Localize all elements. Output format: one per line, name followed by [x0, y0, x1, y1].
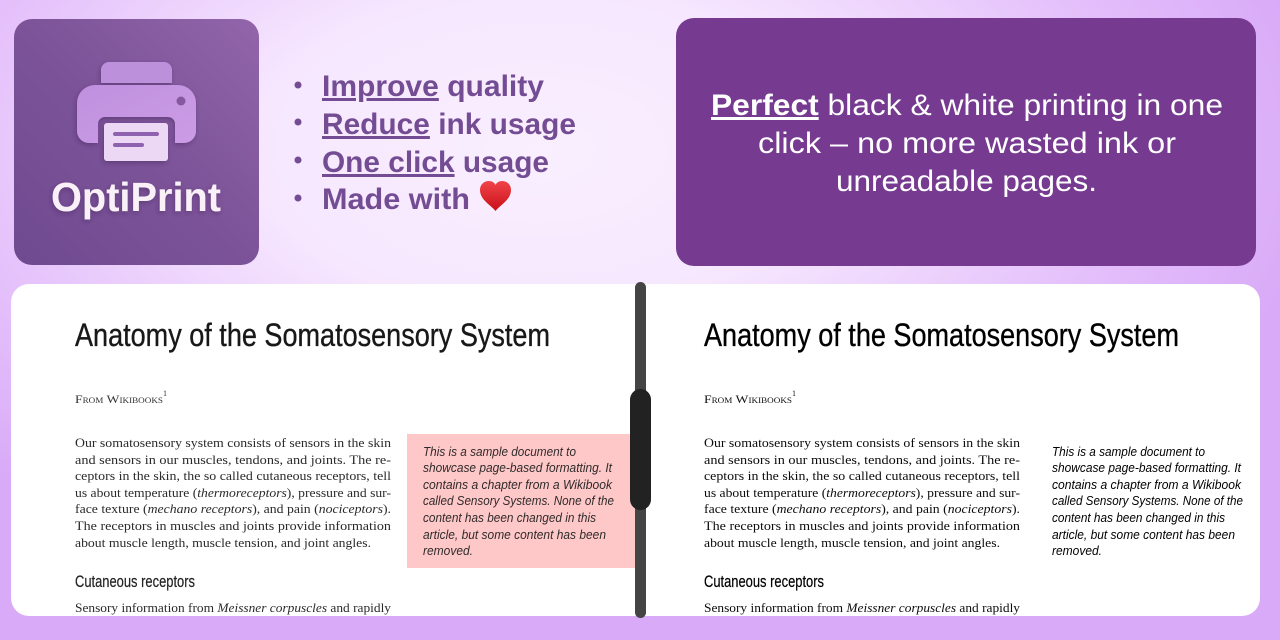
pink callout: content has been changed in this [423, 511, 596, 525]
right page: optimised document [704, 317, 1243, 615]
document title: Anatomy of the Somatosensory System [75, 317, 550, 353]
body paragraph [75, 435, 392, 550]
pink callout: contains a chapter from a Wikibook [423, 478, 613, 492]
callout without background: content has been changed in this [1052, 511, 1225, 525]
section heading: Cutaneous receptors [75, 573, 195, 591]
body paragraph: Our somatosensory system consists of sensors in the skin [75, 435, 392, 450]
body paragraph: ceptors in the skin, the so called cutaneous receptors, tell [704, 468, 1020, 483]
body paragraph: about muscle length, muscle tension, and joint angles. [75, 535, 371, 550]
bullet: one click usage: One click usage [322, 146, 549, 179]
icon: printer [77, 62, 196, 161]
body paragraph: and sensors in our muscles, tendons, and joints. The re- [75, 452, 391, 467]
bullet: made with heart: Made with [322, 183, 470, 216]
icon: heart [480, 181, 511, 211]
body paragraph: ceptors in the skin, the so called cutaneous receptors, tell [75, 468, 391, 483]
body paragraph: us about temperature ( thermoreceptors ), pressure and sur- [704, 485, 1020, 500]
body paragraph: about muscle length, muscle tension, and joint angles. [704, 535, 1000, 550]
tagline text: Perfect black & white printing in one [711, 89, 1223, 122]
cut-off paragraph: Sensory information from Meissner corpuscles and rapidly [75, 600, 392, 615]
byline: From Wikibooks [75, 392, 163, 406]
footnote mark: 1 [792, 389, 796, 398]
pink callout: This is a sample document to [423, 445, 576, 459]
callout without background: article, but some content has been [1052, 528, 1235, 542]
cut-off paragraph: Sensory information from Meissner corpuscles and rapidly [704, 600, 1021, 615]
tagline panel [676, 18, 1256, 266]
pink callout: removed. [423, 544, 473, 558]
body paragraph [704, 435, 1021, 550]
logo wordmark: OptiPrint [51, 174, 221, 220]
body paragraph: face texture ( mechano receptors ), and pain ( nociceptors ). [75, 501, 391, 516]
comparison slider [630, 282, 651, 618]
section heading: Cutaneous receptors [704, 573, 824, 591]
pink callout: called Sensory Systems. None of the [423, 494, 614, 508]
body paragraph: The receptors in muscles and joints provide information [75, 518, 392, 533]
callout without background: called Sensory Systems. None of the [1052, 494, 1243, 508]
bullet: reduce ink usage: Reduce ink usage [322, 108, 576, 141]
callout without background: showcase page-based formatting. It [1052, 461, 1242, 475]
body paragraph: The receptors in muscles and joints provide information [704, 518, 1021, 533]
pink callout: showcase page-based formatting. It [423, 461, 613, 475]
body paragraph: us about temperature ( thermoreceptors ), pressure and sur- [75, 485, 391, 500]
bullet: made with heart [294, 181, 511, 216]
pink callout: article, but some content has been [423, 528, 606, 542]
callout without background [1052, 445, 1243, 558]
tagline text: click – no more wasted ink or [758, 127, 1176, 160]
comparison card [11, 284, 1260, 616]
callout without background: removed. [1052, 544, 1102, 558]
left page: original document [75, 317, 636, 615]
logo panel [14, 19, 259, 265]
slider handle [630, 389, 651, 510]
document title: Anatomy of the Somatosensory System [704, 317, 1179, 353]
pink callout [407, 434, 636, 568]
tagline text: unreadable pages. [836, 165, 1097, 198]
footnote mark: 1 [163, 389, 167, 398]
body paragraph: and sensors in our muscles, tendons, and joints. The re- [704, 452, 1020, 467]
byline: From Wikibooks [704, 392, 792, 406]
bullet: improve quality: Improve quality [322, 70, 544, 103]
feature list [294, 70, 576, 216]
body paragraph: face texture ( mechano receptors ), and pain ( nociceptors ). [704, 501, 1020, 516]
tagline text [711, 89, 1223, 198]
callout without background: This is a sample document to [1052, 445, 1205, 459]
callout without background: contains a chapter from a Wikibook [1052, 478, 1242, 492]
body paragraph: Our somatosensory system consists of sensors in the skin [704, 435, 1021, 450]
